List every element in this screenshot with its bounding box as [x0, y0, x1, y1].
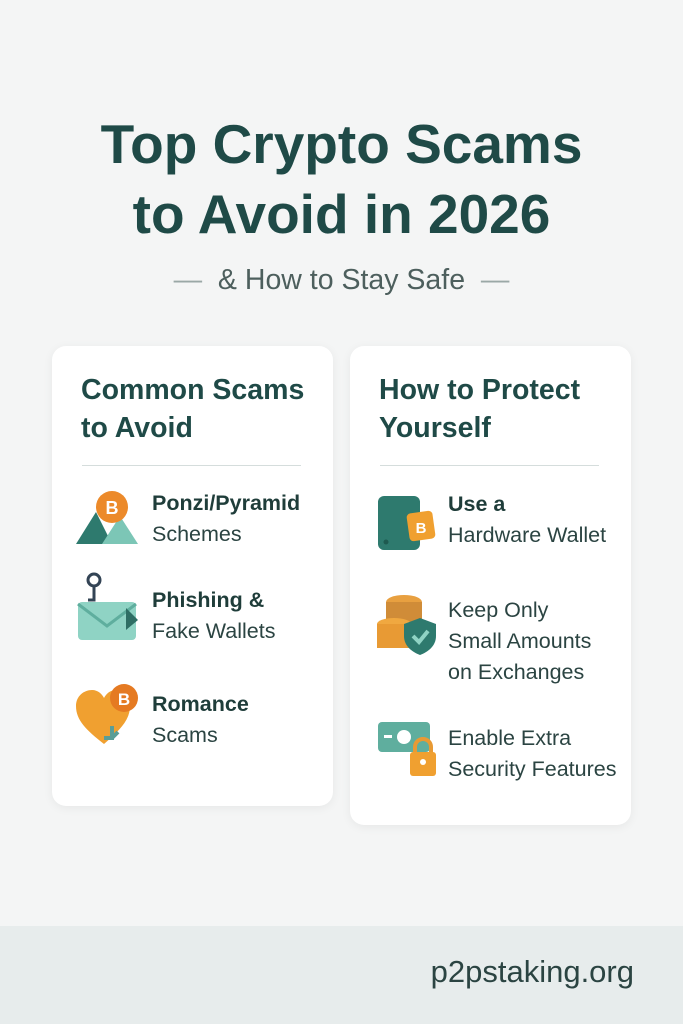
text: small amounts — [448, 598, 591, 684]
text: small amounts: on Exchanges — [448, 660, 584, 684]
text: romance — [152, 692, 249, 747]
text: phishing: Phishing & — [152, 588, 264, 612]
panel: protect yourself — [350, 346, 631, 825]
text: security features: Security Features — [448, 757, 616, 781]
text: phishing — [152, 588, 275, 643]
icon: pyramid: B — [106, 498, 118, 518]
text: security features: Enable Extra — [448, 726, 571, 750]
text: ponzi: Ponzi/Pyramid — [152, 491, 300, 515]
text: phishing: Fake Wallets — [152, 619, 275, 643]
text: small amounts: Small Amounts — [448, 629, 591, 653]
text: small amounts: Keep Only — [448, 598, 548, 622]
icon: phishing envelope — [77, 572, 138, 640]
icon: heart: B — [118, 690, 130, 709]
text: hardware: Use a — [448, 492, 505, 516]
heading: common scams: Common Scams — [81, 374, 304, 406]
text: romance: Romance — [152, 692, 249, 716]
title — [101, 113, 582, 245]
text: hardware: Hardware Wallet — [448, 523, 606, 547]
panel: common scams — [52, 346, 333, 806]
text: security features — [448, 726, 616, 781]
heading: protect — [379, 374, 580, 444]
title: Top Crypto Scams — [101, 113, 582, 175]
icon: security lock — [378, 722, 436, 776]
text: ponzi — [152, 491, 300, 546]
icon: heart — [76, 684, 138, 744]
footer band — [0, 926, 683, 1024]
heading: common scams — [81, 374, 304, 444]
subtitle: — & How to Stay Safe — — [174, 264, 509, 296]
text: romance: Scams — [152, 723, 218, 747]
heading: common scams: to Avoid — [81, 412, 193, 444]
icon: coins shield — [377, 595, 436, 655]
text: ponzi: Schemes — [152, 522, 242, 546]
text: hardware — [448, 492, 606, 547]
title: to Avoid in 2026 — [133, 183, 550, 245]
heading: protect: Yourself — [379, 412, 491, 444]
icon: hardware wallet: B — [416, 520, 427, 537]
footer: website: p2pstaking.org — [431, 954, 634, 989]
icon: hardware wallet — [378, 496, 436, 550]
heading: protect: How to Protect — [379, 374, 580, 406]
icon: pyramid — [76, 491, 138, 544]
